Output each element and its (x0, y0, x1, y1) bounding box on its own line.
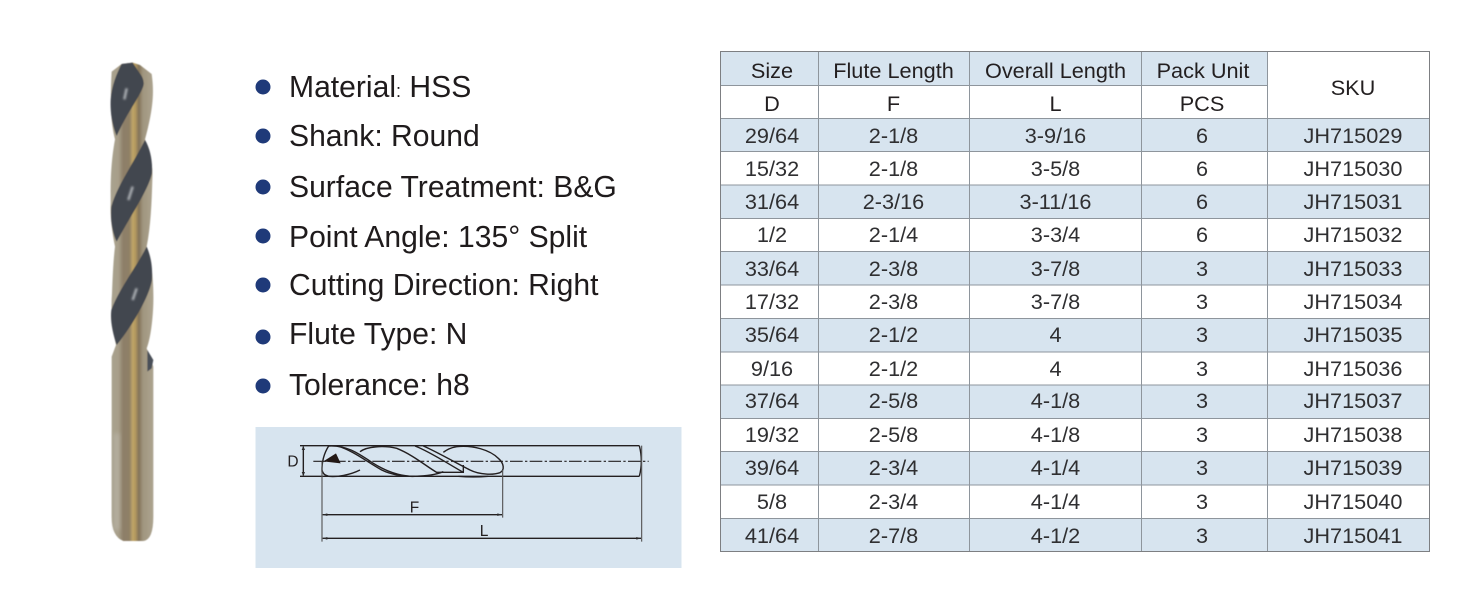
row: 9/16: 9/16 (751, 356, 793, 381)
row: 29/64: 29/64 (745, 123, 799, 148)
row: 17/32: 17/32 (745, 289, 799, 314)
row: 9/16: 2-1/2 (869, 356, 918, 381)
row: 1/2: 3-3/4 (1031, 222, 1080, 247)
row: 19/32 (745, 422, 1402, 447)
table header: D (764, 91, 780, 116)
table header: L (1049, 91, 1062, 116)
row: 41/64 (720, 518, 1430, 552)
row: 33/64: 33/64 (745, 256, 799, 281)
row: 5/8: 5/8 (757, 489, 787, 514)
row: 15/32 (745, 156, 1402, 181)
row: 5/8: 3 (1196, 489, 1208, 514)
row: 29/64: JH715029 (1304, 123, 1402, 148)
bullet item: tolerance: Tolerance: h8 (289, 369, 470, 402)
row: 17/32 (745, 289, 1402, 314)
row: 33/64: 3 (1196, 256, 1208, 281)
row: 33/64 (720, 252, 1430, 285)
bullet item: point angle: Point Angle: 135° Split (289, 221, 588, 254)
row: 39/64: JH715039 (1304, 455, 1402, 480)
table: drill sizes (720, 52, 1430, 552)
row: 31/64: 2-3/16 (863, 189, 924, 214)
row: 29/64: 2-1/8 (869, 123, 918, 148)
row: 37/64: JH715037 (1304, 388, 1402, 413)
label: D: D (287, 454, 299, 470)
row: 29/64: 6 (1196, 123, 1208, 148)
row: 9/16: 4 (1049, 356, 1062, 381)
row: 15/32: 2-1/8 (869, 156, 918, 181)
row: 5/8 (757, 489, 1402, 514)
row: 39/64: 4-1/4 (1031, 455, 1080, 480)
table header: Pack Unit (1157, 58, 1249, 83)
row: 39/64: 39/64 (745, 455, 799, 480)
row: 35/64: 2-1/2 (869, 322, 918, 347)
row: 33/64: 3-7/8 (1031, 256, 1080, 281)
row: 35/64: 4 (1049, 322, 1062, 347)
row: 19/32: JH715038 (1304, 422, 1402, 447)
row: 33/64: JH715033 (1304, 256, 1402, 281)
row: 9/16: JH715036 (1304, 356, 1402, 381)
list: specifications (256, 71, 617, 402)
row: 41/64: JH715041 (1304, 523, 1402, 548)
table header: PCS (1180, 91, 1224, 116)
row: 1/2 (757, 222, 1402, 247)
row: 41/64: 2-7/8 (869, 523, 918, 548)
bullet item: material: Material: HSS (289, 71, 471, 104)
row: 41/64: 41/64 (745, 523, 799, 548)
row: 37/64 (720, 385, 1430, 418)
row: 29/64 (720, 118, 1430, 152)
table header: SKU (1331, 75, 1375, 100)
row: 1/2: 1/2 (757, 222, 787, 247)
row: 19/32: 2-5/8 (869, 422, 918, 447)
row: 17/32: 3-7/8 (1031, 289, 1080, 314)
row: 15/32: JH715030 (1304, 156, 1402, 181)
table header: F (887, 91, 900, 116)
row: 17/32: JH715034 (1304, 289, 1402, 314)
row: 37/64: 4-1/8 (1031, 388, 1080, 413)
row: 15/32: 3-5/8 (1031, 156, 1080, 181)
row: 15/32: 6 (1196, 156, 1208, 181)
bullet item: cutting direction: Cutting Direction: Right (289, 269, 599, 302)
row: 37/64: 2-5/8 (869, 388, 918, 413)
bullet item: shank: Shank: Round (289, 120, 480, 153)
row: 39/64: 3 (1196, 455, 1208, 480)
row: 5/8: 2-3/4 (869, 489, 918, 514)
row: 35/64: JH715035 (1304, 322, 1402, 347)
row: 37/64: 37/64 (745, 388, 799, 413)
row: 1/2: 6 (1196, 222, 1208, 247)
row: 19/32: 4-1/8 (1031, 422, 1080, 447)
row: 9/16 (751, 356, 1402, 381)
table header: Flute Length (833, 58, 954, 83)
row: 31/64: 31/64 (745, 189, 799, 214)
row: 35/64: 3 (1196, 322, 1208, 347)
bullet item: surface treatment: Surface Treatment: B&G (289, 171, 617, 204)
row: 41/64: 3 (1196, 523, 1208, 548)
row: 39/64: 2-3/4 (869, 455, 918, 480)
panel: drill dimension diagram (256, 427, 682, 568)
row: 41/64: 4-1/2 (1031, 523, 1080, 548)
label: F: F (410, 500, 419, 516)
row: 31/64: 6 (1196, 189, 1208, 214)
row: 19/32: 19/32 (745, 422, 799, 447)
row: 31/64: 3-11/16 (1020, 189, 1091, 214)
row: 5/8: 4-1/4 (1031, 489, 1080, 514)
row: 35/64 (720, 318, 1430, 352)
row: 29/64: 3-9/16 (1025, 123, 1086, 148)
row: 31/64 (720, 185, 1430, 218)
row: 15/32: 15/32 (745, 156, 799, 181)
row: 33/64: 2-3/8 (869, 256, 918, 281)
row: 35/64: 35/64 (745, 322, 799, 347)
row: 1/2: 2-1/4 (869, 222, 918, 247)
row: 39/64 (720, 452, 1430, 485)
icon: drill bit photo (111, 63, 153, 541)
row: 17/32: 3 (1196, 289, 1208, 314)
bullet item: flute type: Flute Type: N (289, 318, 467, 351)
table header: Overall Length (985, 58, 1126, 83)
row: 31/64: JH715031 (1304, 189, 1402, 214)
table header (720, 52, 1375, 116)
row: 37/64: 3 (1196, 388, 1208, 413)
table header: Size (751, 58, 793, 83)
row: 9/16: 3 (1196, 356, 1208, 381)
row: 17/32: 2-3/8 (869, 289, 918, 314)
row: 19/32: 3 (1196, 422, 1208, 447)
row: 5/8: JH715040 (1304, 489, 1402, 514)
label: L: L (480, 523, 489, 540)
row: 1/2: JH715032 (1304, 222, 1402, 247)
